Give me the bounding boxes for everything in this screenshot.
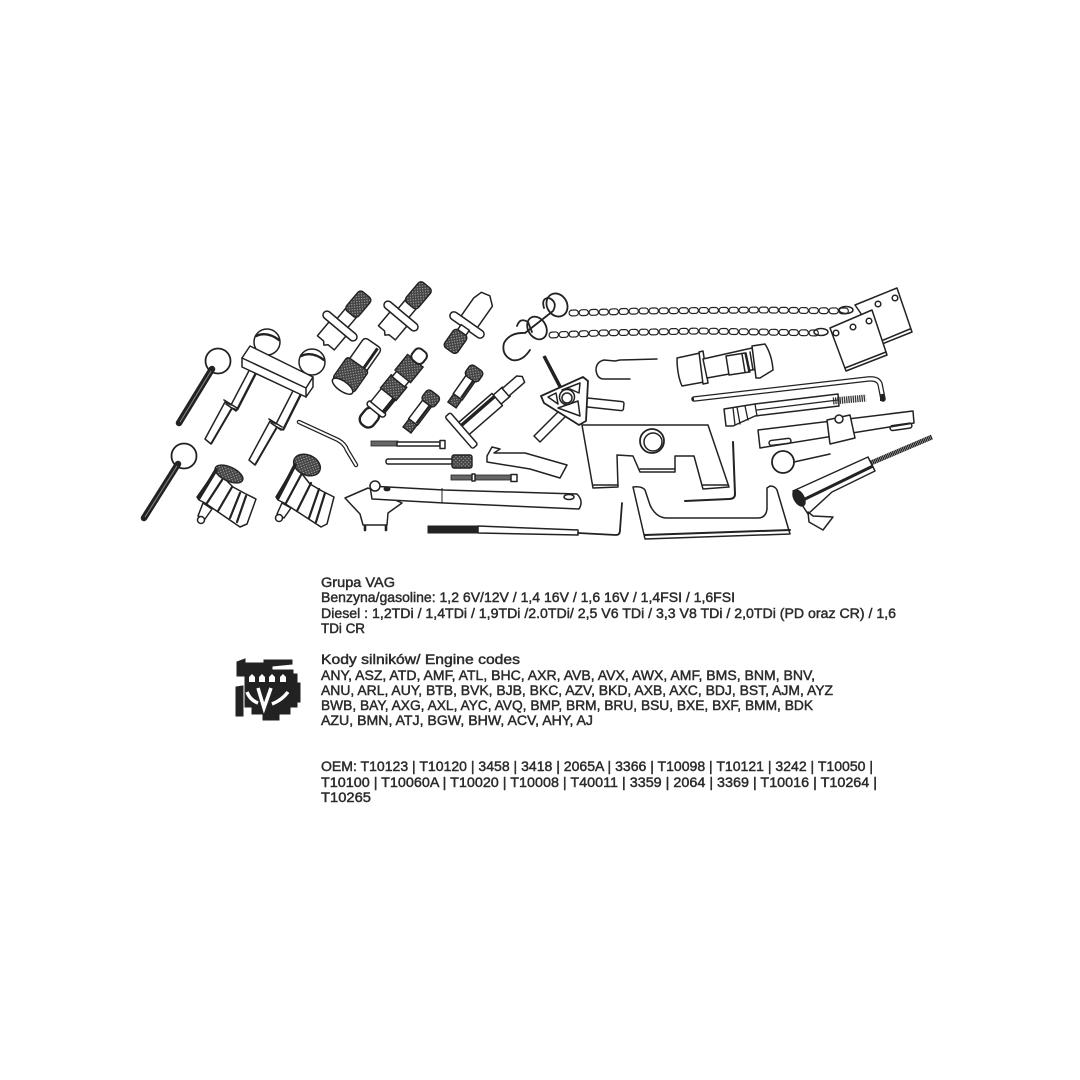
vehicle group text [321, 575, 896, 636]
tube with spring [724, 394, 866, 426]
heading: group: Grupa VAG [321, 575, 395, 590]
diesel engines: Diesel : 1,2TDi / 1,4TDi / 1,9TDi /2.0TDi/ 2,5 V6 TDi / 3,3 V8 TDi / 2,0TDi (PD oraz CR) / 1,6 [321, 606, 896, 621]
OEM numbers text: T10100 | T10060A | T10020 | T10008 | T40011 | 3359 | 2064 | 3369 | T10016 | T10264 | [321, 775, 877, 790]
sleeve tool 2 [276, 450, 334, 527]
T-handle tool [445, 361, 537, 449]
large stepped plate [582, 425, 729, 489]
tools illustration [144, 272, 932, 539]
flanged pin C [433, 283, 505, 362]
knurled cylinder [329, 335, 384, 398]
curved bar [487, 447, 567, 478]
end links [814, 306, 853, 336]
long hex key [694, 379, 885, 401]
heading: engine codes: Kody silników/ Engine codes [321, 652, 520, 667]
square tag back [855, 288, 912, 344]
sleeve tool 1 [197, 461, 256, 527]
shoulder bolt 1 [401, 388, 441, 435]
tensioner tool [790, 437, 932, 530]
OEM numbers text: T10265 [321, 790, 371, 805]
engine code list [321, 668, 833, 728]
chains [503, 290, 853, 360]
engine icon [236, 659, 300, 720]
diesel engines [321, 606, 896, 636]
diesel engines: TDi CR [321, 621, 365, 636]
bracket with two rods [205, 329, 325, 465]
knurled pin [386, 455, 472, 468]
square tag front [830, 310, 887, 371]
engine code list: ANY, ASZ, ATD, AMF, ATL, BHC, AXR, AVB, AVX, AWX, AMF, BMS, BNM, BNV, [321, 668, 815, 683]
bent rod [299, 422, 356, 465]
screw 2 [451, 474, 517, 482]
ring pin small [772, 451, 830, 473]
socket cylinder [677, 344, 773, 386]
OEM numbers text [321, 759, 877, 805]
small L key [685, 442, 735, 501]
slotted bar with clamp [758, 411, 914, 448]
engine code list: ANU, ARL, AUY, BTB, BVK, BJB, BKC, AZV, BKD, AXB, AXC, BDJ, BST, AJM, AYZ [321, 683, 833, 698]
U-shaped plate [633, 486, 790, 539]
hook pin [596, 359, 657, 379]
rings and hooks [503, 290, 572, 360]
ring pin lower left [144, 444, 196, 518]
triangular tool with pins [534, 356, 624, 442]
flanged pin B [369, 272, 443, 349]
ring pin upper left [179, 348, 230, 423]
chain lower [552, 331, 818, 335]
gasoline engines: Benzyna/gasoline: 1,2 6V/12V / 1,4 16V / 1,6 16V / 1,4FSI / 1,6FSI [321, 590, 735, 605]
shoulder bolt 2 [445, 364, 484, 410]
engine code list: AZU, BMN, ATJ, BGW, BHW, ACV, AHY, AJ [321, 713, 593, 728]
chain upper [572, 310, 848, 313]
adjusting wrench [345, 481, 581, 530]
engine code list: BWB, BAY, AXG, AXL, AYC, AVQ, BMP, BRM, BRU, BSU, BXE, BXF, BMM, BDK [321, 698, 813, 713]
engine codes text [321, 652, 833, 728]
long stepped pin [355, 344, 432, 432]
flanged pin A [308, 281, 382, 359]
OEM numbers text: OEM: T10123 | T10120 | 3458 | 3418 | 2065A | 3366 | T10098 | T10121 | 3242 | T10050 | [321, 759, 873, 774]
screw 1 [371, 440, 445, 448]
long key with knurled handle [428, 503, 622, 535]
